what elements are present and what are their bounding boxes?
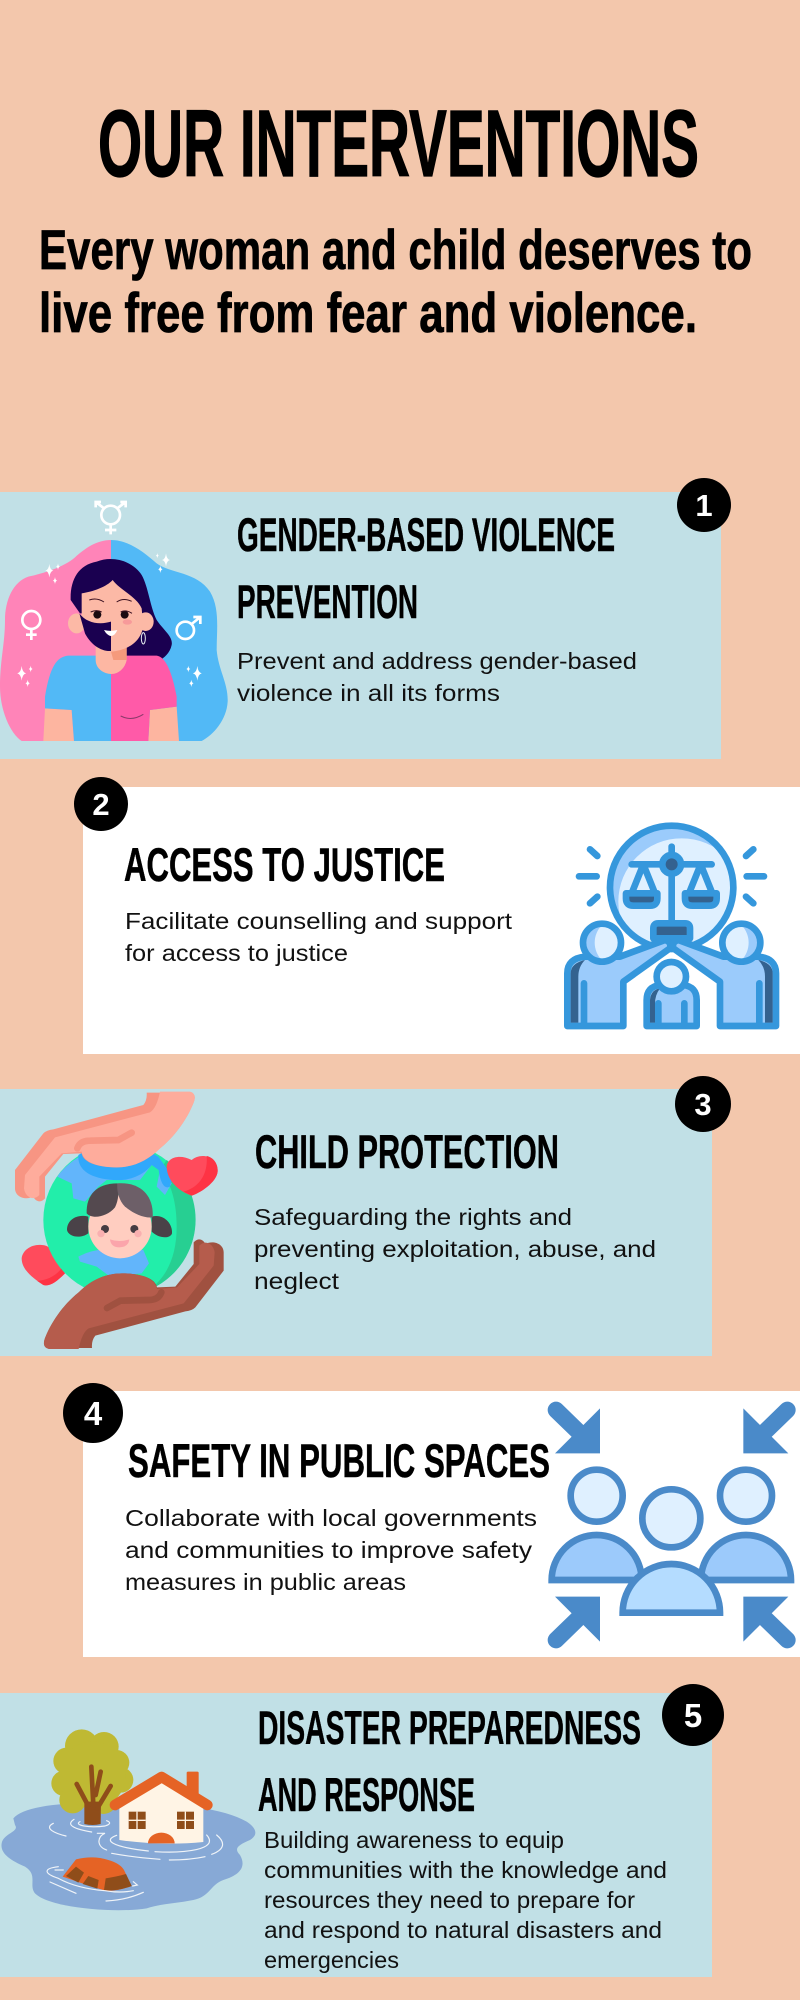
text block: Prevent and address gender-based [237, 648, 637, 674]
heading [258, 1701, 641, 1821]
text block: and respond to natural disasters and [264, 1917, 662, 1943]
icon: scales of justice and family [567, 826, 776, 1026]
text block: preventing exploitation, abuse, and [254, 1236, 656, 1262]
icon: people with inward arrows [552, 1408, 791, 1642]
text block: communities with the knowledge and [264, 1857, 667, 1883]
text block: neglect [254, 1268, 340, 1294]
number badge 3 [675, 1076, 731, 1132]
panel: gender-based violence prevention [0, 492, 721, 759]
text block: and communities to improve safety [125, 1537, 532, 1563]
heading [237, 508, 615, 628]
number badge 5: 5 [684, 1697, 702, 1734]
panel: child protection [0, 1089, 712, 1356]
icon: child in globe held by hands [15, 1092, 224, 1349]
panel: access to justice [83, 787, 800, 1054]
text block [254, 1204, 656, 1294]
number badge 2: 2 [92, 787, 110, 822]
text block: Building awareness to equip [264, 1827, 564, 1853]
number badge 4: 4 [84, 1395, 103, 1432]
icon: gender person [0, 502, 228, 741]
text block: measures in public areas [125, 1569, 406, 1595]
number badge 1 [677, 478, 731, 532]
text block [125, 1505, 537, 1595]
panel: safety in public spaces [83, 1391, 800, 1657]
text block: for access to justice [125, 940, 348, 966]
panel: disaster preparedness and response [0, 1693, 712, 1977]
heading: ACCESS TO JUSTICE [124, 838, 445, 891]
number badge 3: 3 [694, 1087, 712, 1122]
heading: CHILD PROTECTION [255, 1125, 559, 1178]
heading: SAFETY IN PUBLIC SPACES [128, 1434, 550, 1487]
number badge 2 [74, 777, 128, 831]
text block: violence in all its forms [237, 680, 500, 706]
icon: flooded house [1, 1729, 255, 1910]
heading: AND RESPONSE [258, 1768, 475, 1821]
text block: Facilitate counselling and support [125, 908, 513, 934]
number badge 1: 1 [695, 488, 713, 523]
text block [237, 648, 637, 706]
text block [264, 1827, 667, 1973]
number badge 4 [63, 1383, 123, 1443]
text block [125, 908, 513, 966]
heading: PREVENTION [237, 575, 418, 628]
text block: resources they need to prepare for [264, 1887, 635, 1913]
text block: Collaborate with local governments [125, 1505, 537, 1531]
text block: emergencies [264, 1947, 399, 1973]
subtitle [39, 218, 752, 344]
number badge 5 [662, 1684, 724, 1746]
text block: Safeguarding the rights and [254, 1204, 572, 1230]
